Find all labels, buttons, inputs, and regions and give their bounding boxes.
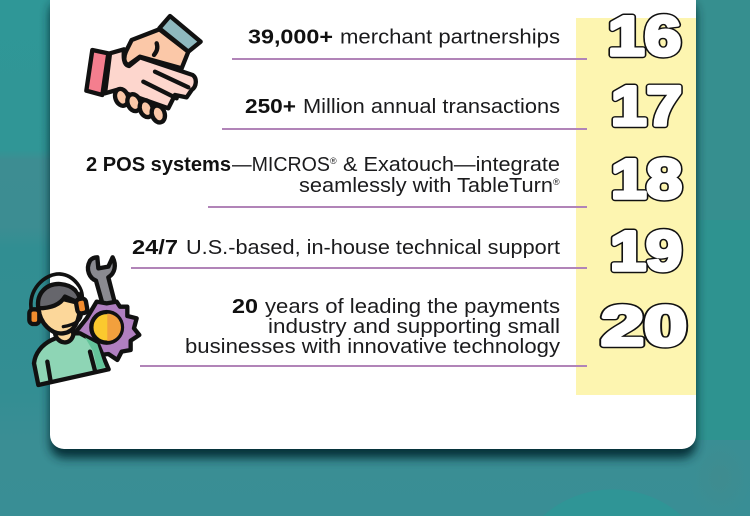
stat 20 text bbox=[185, 296, 560, 358]
icon: handshake bbox=[86, 16, 201, 124]
number 20: 20 bbox=[601, 294, 687, 357]
stat 18 divider bbox=[208, 206, 587, 208]
number 17: 17 bbox=[611, 74, 682, 137]
number 16: 16 bbox=[608, 4, 681, 67]
stat 18 text: seamlessly with TableTurn bbox=[299, 175, 553, 197]
yellow number column bbox=[576, 18, 696, 395]
stat 16 text: merchant partnerships bbox=[340, 26, 560, 48]
stat 18 text: ® bbox=[553, 177, 560, 187]
stat 19: technical support bbox=[131, 219, 682, 282]
stat 19 text: 24/7 bbox=[132, 237, 178, 259]
body bbox=[34, 333, 109, 385]
gear hub bbox=[91, 312, 122, 343]
stat 20 divider bbox=[140, 365, 587, 367]
number 19: 19 bbox=[610, 219, 682, 282]
finger lines bbox=[143, 43, 188, 98]
number 20: 20 bbox=[601, 294, 687, 357]
stat 18 text: 2 POS systems bbox=[86, 154, 231, 176]
stat 16 text bbox=[248, 26, 560, 48]
icon: support agent with wrench and gear bbox=[29, 257, 139, 385]
stat 18: POS systems bbox=[86, 147, 682, 210]
stat 16: merchant partnerships bbox=[232, 4, 681, 67]
stat 19 divider bbox=[131, 267, 587, 269]
stat 20: years in payments bbox=[140, 294, 687, 367]
headset bbox=[31, 274, 82, 312]
number 19: 19 bbox=[610, 219, 682, 282]
stat 17 text: Million annual transactions bbox=[303, 96, 560, 118]
stat 17 divider bbox=[222, 128, 587, 130]
stat 17 text: 250+ bbox=[245, 96, 296, 118]
stat 18 text: & Exatouch—integrate bbox=[343, 154, 560, 176]
stat 16 text: 39,000+ bbox=[248, 26, 333, 48]
card shadow bbox=[50, 0, 696, 458]
fingers bbox=[113, 87, 167, 124]
stat 18 text: ® bbox=[330, 156, 337, 166]
hair bbox=[38, 284, 80, 308]
stat 18 text: —MICROS bbox=[232, 154, 330, 176]
number 18: 18 bbox=[611, 147, 682, 210]
number 17: 17 bbox=[611, 74, 682, 137]
stat 20 text: industry and supporting small bbox=[268, 316, 560, 338]
left cuff bbox=[86, 50, 108, 95]
neck and face bbox=[55, 325, 73, 342]
right hand bbox=[124, 29, 188, 68]
stat 18 text bbox=[86, 154, 560, 197]
stat 20 text: 20 bbox=[232, 296, 258, 318]
white card bbox=[50, 0, 696, 449]
stat 20 text: businesses with innovative technology bbox=[185, 336, 560, 358]
stat 20 text: years of leading the payments bbox=[265, 296, 560, 318]
left hand bbox=[105, 49, 196, 108]
wrench bbox=[88, 257, 115, 307]
number 18: 18 bbox=[611, 147, 682, 210]
gear bbox=[73, 302, 139, 360]
stat 16 divider bbox=[232, 58, 587, 60]
right cuff bbox=[159, 16, 201, 52]
stat 17: annual transactions bbox=[222, 74, 682, 137]
number 16: 16 bbox=[608, 4, 681, 67]
stat 19 text: U.S.-based, in-house technical support bbox=[186, 237, 560, 259]
